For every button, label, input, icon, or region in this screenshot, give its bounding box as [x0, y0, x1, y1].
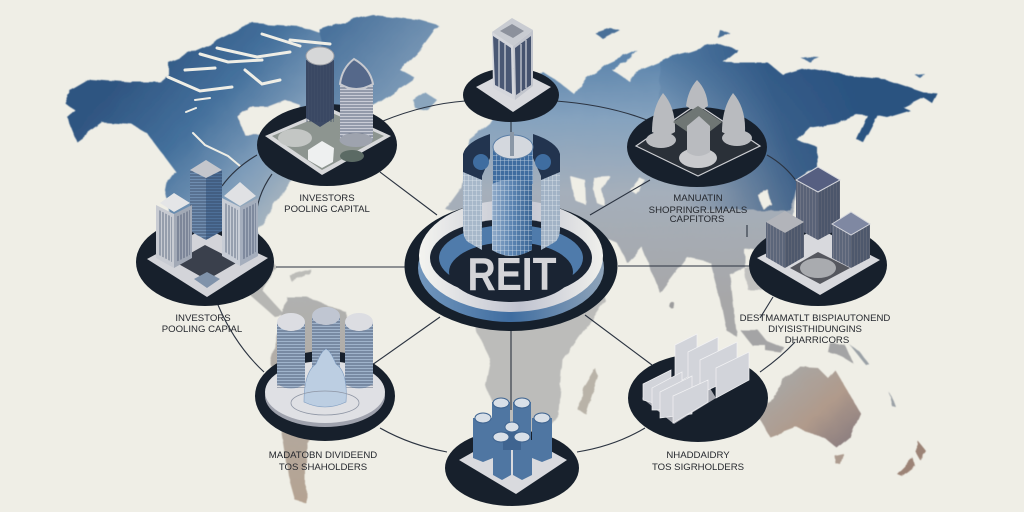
cylindrical tower — [306, 60, 334, 127]
node: top building — [463, 18, 559, 122]
cylinder cluster — [473, 402, 552, 480]
map: Africa — [465, 250, 605, 440]
label: shopping malls: MANUATIN — [673, 193, 723, 204]
connector lines — [218, 101, 797, 452]
node: bottom right slabs — [628, 334, 768, 442]
map: Madagascar — [579, 368, 598, 414]
blue edge — [418, 214, 604, 322]
spokes — [276, 118, 752, 410]
map: Eurasia — [446, 43, 937, 337]
label: mandatory shareholders: NHADDAIDRY — [666, 450, 730, 461]
blue inner crescents — [439, 225, 583, 291]
map: Mexico and Central America — [235, 245, 285, 317]
centre tower — [796, 180, 818, 240]
map: Southeast Asian islands — [740, 330, 853, 363]
slab rows — [643, 334, 749, 423]
label: mandatory dividend — [269, 450, 377, 473]
map: South America — [270, 297, 352, 503]
plaza — [147, 228, 268, 297]
outer ring arcs — [218, 101, 797, 452]
label: mandatory dividend: MADATOBN DIVIDEEND — [269, 450, 377, 461]
map: Pacific islands — [850, 345, 897, 408]
label: shopping malls — [649, 193, 747, 225]
label: mandatory dividend: TOS SHAHOLDERS — [279, 462, 367, 473]
map white arctic channels — [168, 34, 330, 166]
node: shopping malls top right — [627, 80, 767, 187]
inner dark well — [430, 219, 592, 297]
dome tower — [340, 82, 373, 140]
label: investors pooling capital, top — [284, 193, 370, 215]
white ring — [419, 200, 603, 312]
upper cylinder — [493, 147, 533, 184]
ornate buildings — [646, 80, 752, 168]
map: Tasmania — [834, 453, 843, 464]
platform — [476, 68, 551, 112]
plaza — [459, 430, 567, 494]
central REIT hub — [404, 132, 618, 331]
map: North America — [65, 23, 345, 255]
side drums — [463, 134, 490, 250]
tower — [492, 32, 515, 100]
left tower — [156, 205, 174, 268]
map: Greenland — [320, 15, 438, 120]
label: investors pooling capital, top: INVESTORS — [299, 193, 355, 204]
glass fountain — [304, 349, 346, 407]
map: East Asia dark overlay — [660, 43, 937, 210]
label: shopping malls: SHOPRINGR.LMAALS — [649, 205, 747, 216]
right block — [832, 224, 851, 268]
node: bottom cylinders — [445, 398, 579, 506]
label: investors pooling capital, left: INVESTORS — [175, 313, 231, 324]
base disc — [404, 201, 618, 331]
label: investors pooling capital, top: POOLING CAPITAL — [284, 204, 370, 215]
map: arctic island — [413, 92, 437, 110]
node: investors top left — [257, 47, 397, 186]
map: Arctic Asian islands — [595, 28, 925, 78]
label: shopping malls: CAPFITORS — [670, 214, 724, 225]
plaza — [757, 228, 880, 295]
node: bottom left fountain — [255, 307, 395, 441]
map: New Zealand — [897, 440, 927, 476]
REIT lettering: REIT — [468, 248, 556, 300]
map: Hudson bay — [238, 100, 300, 135]
main cylinder — [492, 180, 532, 256]
label: mandatory shareholders: TOS SIGRHOLDERS — [652, 462, 744, 473]
plaza outline — [636, 104, 760, 176]
right tower — [222, 198, 240, 266]
centre tower — [190, 170, 206, 240]
spire — [510, 132, 514, 156]
label: investors pooling capital, left — [162, 313, 243, 335]
disc — [265, 365, 385, 427]
label: distributions: DESTMAMATLT BISPIAUTONEND — [740, 313, 890, 324]
label: distributions — [740, 313, 890, 346]
plaza — [265, 108, 391, 175]
label: mandatory shareholders — [652, 450, 744, 473]
label: distributions: DHARRICORS — [785, 335, 849, 346]
left block — [766, 222, 785, 268]
node: right towers — [749, 167, 887, 306]
label: investors pooling capital, left: POOLING CAPIAL — [162, 324, 243, 335]
node: investors left — [136, 160, 274, 306]
map: Caribbean islands — [290, 270, 312, 282]
map: Australia — [758, 367, 860, 448]
map: white seas — [570, 176, 772, 208]
label: distributions: DIYISISTHIDUNGINS — [768, 324, 862, 335]
striped towers — [277, 322, 305, 388]
map: Sri Lanka — [670, 302, 674, 308]
